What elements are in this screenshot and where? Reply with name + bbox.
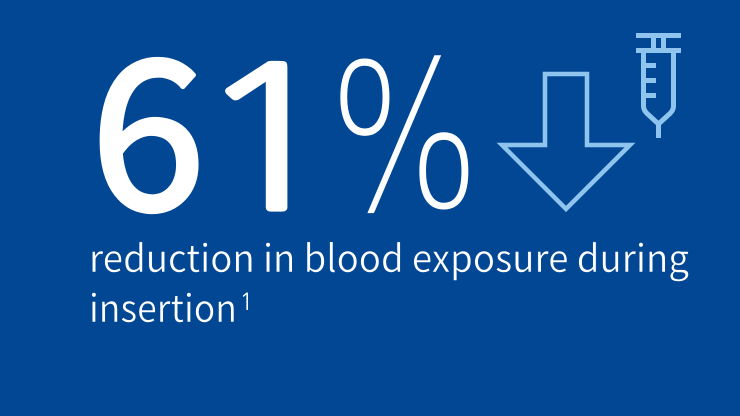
caption text: 1 <box>240 291 253 314</box>
number: 61 <box>91 0 346 269</box>
headline statistic: 61% <box>91 0 490 269</box>
number: 61: 1 <box>190 40 346 239</box>
caption text: insertion <box>89 278 237 333</box>
icon: down arrow <box>502 74 630 209</box>
percent sign: % <box>319 36 490 242</box>
caption text: reduction in blood exposure during <box>89 228 689 283</box>
caption text <box>89 228 689 333</box>
icon: syringe <box>636 36 681 138</box>
